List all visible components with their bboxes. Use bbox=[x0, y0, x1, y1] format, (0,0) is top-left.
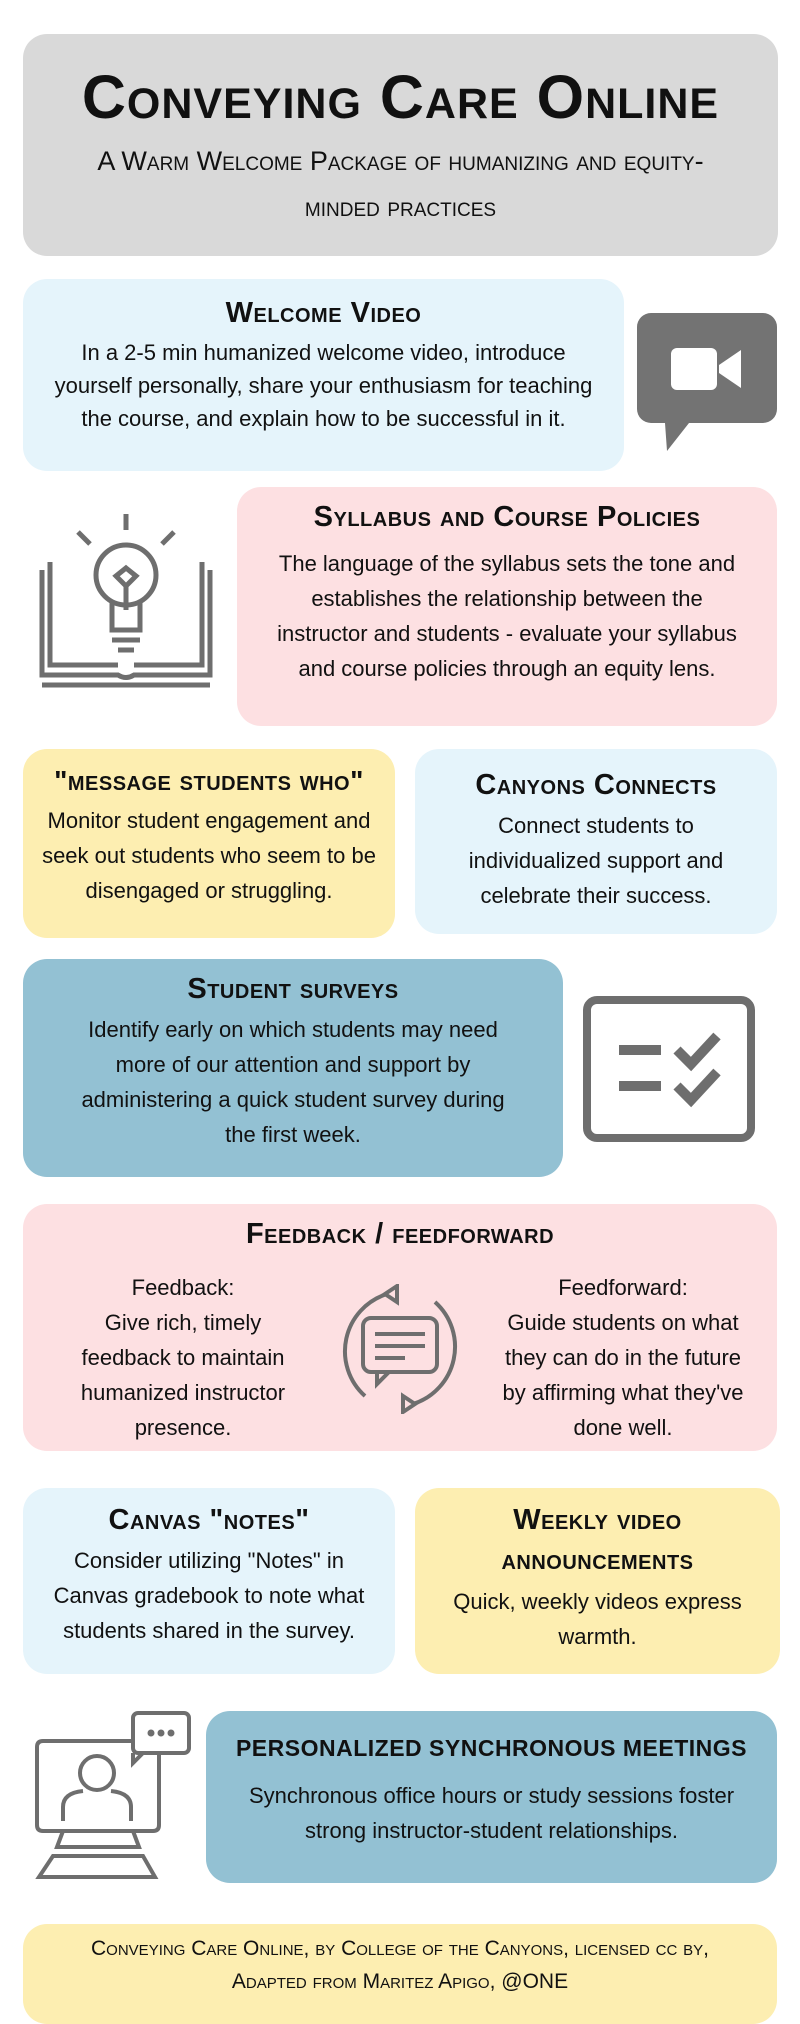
heading: Syllabus and Course Policies bbox=[314, 501, 700, 533]
text: feedforward: they can do in the future bbox=[505, 1345, 741, 1370]
text bbox=[81, 1017, 505, 1147]
icon: lightbulb book bbox=[40, 514, 212, 688]
text: instructor and students - evaluate your syllabus bbox=[277, 621, 737, 646]
text: feedforward: Feedforward: bbox=[558, 1275, 688, 1300]
text: feedback: presence. bbox=[135, 1415, 231, 1440]
text: feedback: feedback to maintain bbox=[81, 1345, 285, 1370]
heading: Welcome Video bbox=[226, 297, 421, 329]
text bbox=[277, 551, 737, 681]
heading bbox=[501, 1504, 694, 1576]
text: disengaged or struggling. bbox=[85, 878, 333, 903]
text: more of our attention and support by bbox=[116, 1052, 470, 1077]
text: individualized support and bbox=[469, 848, 723, 873]
title panel bbox=[23, 34, 778, 256]
heading: Student surveys bbox=[187, 973, 399, 1005]
heading: announcements bbox=[501, 1544, 694, 1576]
icon: computer meeting bbox=[35, 1711, 191, 1879]
panel: syllabus bbox=[237, 487, 777, 726]
heading: Feedback / feedforward bbox=[246, 1218, 554, 1250]
panel: student surveys bbox=[23, 959, 563, 1177]
text: Monitor student engagement and bbox=[48, 808, 370, 833]
text bbox=[54, 340, 592, 431]
text: feedforward bbox=[502, 1275, 744, 1440]
text bbox=[42, 808, 376, 903]
heading: Canyons Connects bbox=[475, 769, 717, 801]
text: Consider utilizing "Notes" in bbox=[74, 1548, 344, 1573]
text: feedback: Give rich, timely bbox=[105, 1310, 261, 1335]
text: feedback: humanized instructor bbox=[81, 1380, 285, 1405]
panel: canyons connects bbox=[415, 749, 777, 934]
subtitle: A Warm Welcome Package of humanizing and equity- bbox=[97, 146, 704, 176]
icon: video chat bubble bbox=[637, 313, 777, 451]
panel: welcome video bbox=[23, 279, 624, 471]
text: feedback: Feedback: bbox=[132, 1275, 234, 1300]
icon: checklist bbox=[583, 996, 755, 1142]
text: students shared in the survey. bbox=[63, 1618, 355, 1643]
text: and course policies through an equity lens. bbox=[298, 656, 716, 681]
panel: message students who bbox=[23, 749, 395, 938]
text: Identify early on which students may need bbox=[88, 1017, 498, 1042]
text: establishes the relationship between the bbox=[311, 586, 703, 611]
text: seek out students who seem to be bbox=[42, 843, 376, 868]
heading: Canvas "notes" bbox=[109, 1504, 309, 1536]
text bbox=[249, 1783, 734, 1843]
text: administering a quick student survey during bbox=[81, 1087, 505, 1112]
text: Connect students to bbox=[498, 813, 694, 838]
text: the first week. bbox=[225, 1122, 361, 1147]
text: yourself personally, share your enthusiasm for teaching bbox=[55, 373, 592, 398]
icon: feedback cycle bbox=[342, 1284, 458, 1414]
footer credit: Conveying Care Online, by College of the Canyons, licensed cc by, bbox=[91, 1937, 709, 1960]
panel: feedback / feedforward bbox=[23, 1204, 777, 1451]
panel: weekly video announcements bbox=[415, 1488, 780, 1674]
footer credit bbox=[23, 1924, 777, 2024]
heading: "message students who" bbox=[54, 765, 364, 796]
text: warmth. bbox=[558, 1624, 637, 1649]
text: celebrate their success. bbox=[480, 883, 712, 908]
heading: PERSONALIZED SYNCHRONOUS MEETINGS bbox=[236, 1735, 747, 1761]
title: Conveying Care Online bbox=[82, 63, 719, 131]
text: The language of the syllabus sets the tone and bbox=[279, 551, 735, 576]
text: feedback bbox=[81, 1275, 285, 1440]
text bbox=[54, 1548, 364, 1643]
subtitle bbox=[97, 146, 704, 222]
text: In a 2-5 min humanized welcome video, introduce bbox=[81, 340, 566, 365]
text: feedforward: done well. bbox=[573, 1415, 673, 1440]
text: Synchronous office hours or study sessions foster bbox=[249, 1783, 734, 1808]
footer credit: Adapted from Maritez Apigo, @ONE bbox=[232, 1970, 568, 1993]
subtitle: minded practices bbox=[305, 192, 496, 222]
text: strong instructor-student relationships. bbox=[305, 1818, 678, 1843]
text: Quick, weekly videos express bbox=[453, 1589, 742, 1614]
text bbox=[469, 813, 723, 908]
text: feedforward: Guide students on what bbox=[507, 1310, 739, 1335]
panel: personalized synchronous meetings bbox=[206, 1711, 777, 1883]
text bbox=[453, 1589, 742, 1649]
text: Canvas gradebook to note what bbox=[54, 1583, 364, 1608]
text: feedforward: by affirming what they've bbox=[502, 1380, 744, 1405]
panel: canvas notes bbox=[23, 1488, 395, 1674]
text: the course, and explain how to be successful in it. bbox=[81, 406, 566, 431]
heading: Weekly video bbox=[513, 1504, 682, 1536]
